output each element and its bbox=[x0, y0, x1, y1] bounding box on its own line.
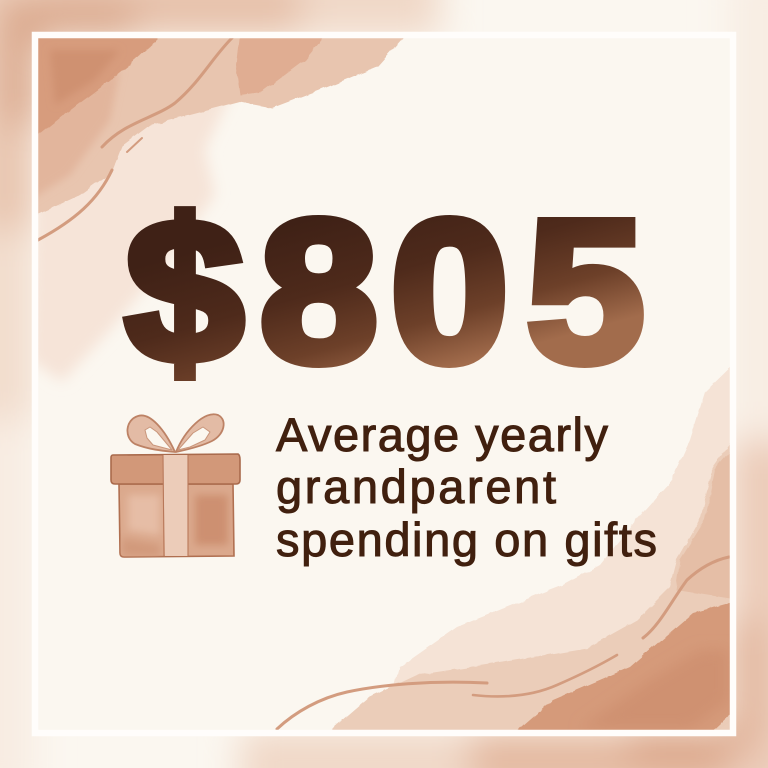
bow bbox=[127, 414, 224, 452]
big number: $805 bbox=[125, 179, 645, 404]
caption line 2: grandparent bbox=[276, 460, 556, 513]
box shading bbox=[122, 495, 228, 556]
caption line 3: spending on gifts bbox=[276, 513, 657, 566]
caption line 1: Average yearly bbox=[276, 408, 608, 461]
top-left streaks bbox=[38, 38, 232, 240]
bottom-right watercolor wash bbox=[394, 367, 730, 684]
box body bbox=[119, 484, 234, 557]
ribbon bbox=[163, 455, 188, 556]
bottom-right streaks bbox=[277, 557, 729, 729]
caption bbox=[276, 408, 657, 566]
icon: gift box bbox=[111, 414, 240, 557]
box lid bbox=[111, 454, 240, 484]
